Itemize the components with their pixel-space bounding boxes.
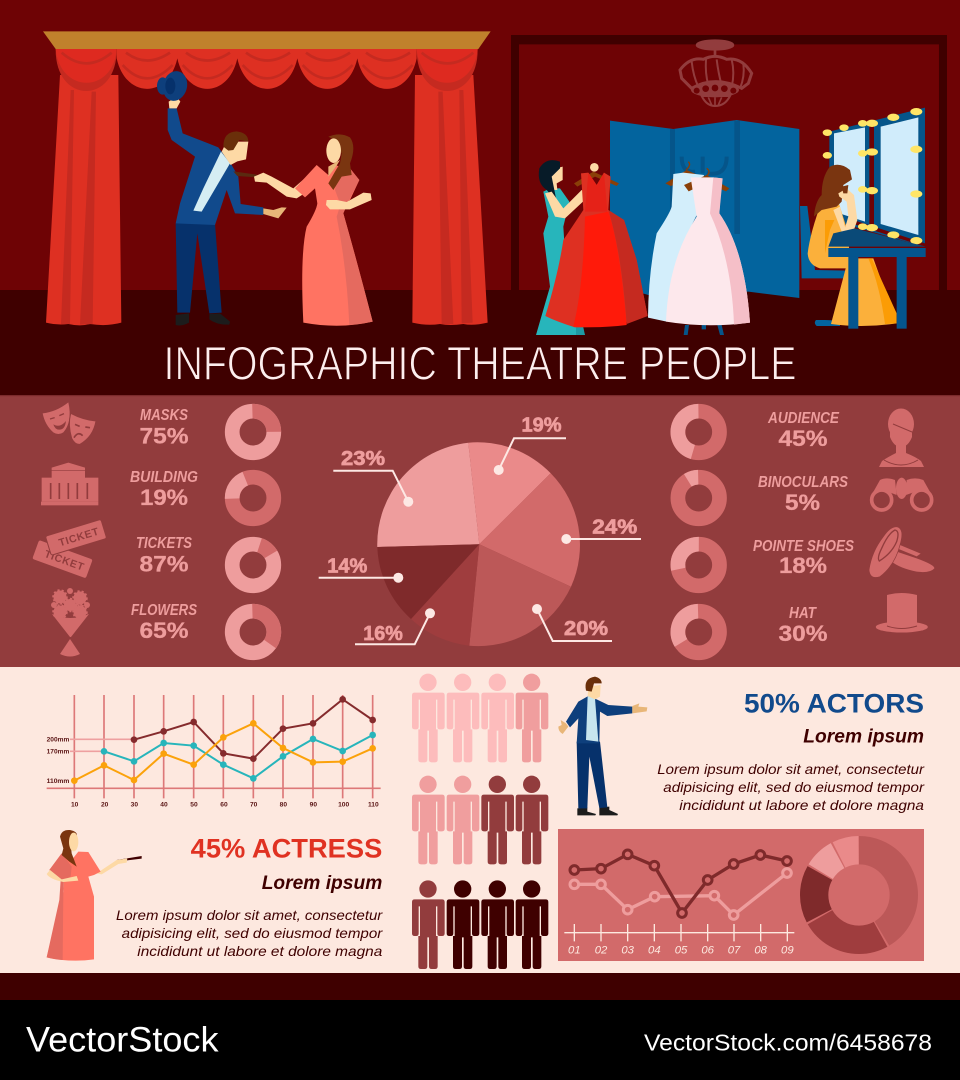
label: tickets: 87% xyxy=(140,552,188,576)
callout: 19%: 19% xyxy=(522,415,562,437)
label: pointe shoes xyxy=(753,538,855,578)
donut: hat xyxy=(670,604,727,660)
axis xyxy=(564,924,794,956)
label: audience: 45% xyxy=(778,426,828,451)
actors paragraph xyxy=(657,761,925,813)
axis: 01 xyxy=(568,944,581,956)
actress paragraph: adipisicing elit, sed do eiusmod tempor xyxy=(122,925,384,941)
callout: 14%: 14% xyxy=(327,556,368,578)
actress subheading: Lorem ipsum xyxy=(262,872,382,894)
label: masks: MASKS xyxy=(140,407,189,424)
actor figure xyxy=(558,677,647,815)
chandelier xyxy=(680,40,752,106)
panel: lower cream section xyxy=(0,667,960,973)
actors paragraph: Lorem ipsum dolor sit amet, consectetur xyxy=(657,761,925,777)
axis: 02 xyxy=(595,944,608,956)
donut: binoculars xyxy=(670,470,727,526)
dark series xyxy=(570,850,791,917)
white dresses on stand xyxy=(648,162,750,335)
donut: flowers xyxy=(232,611,274,653)
callout: 20% xyxy=(532,604,612,641)
label: pointe shoes: POINTE SHOES xyxy=(753,538,855,555)
footer logo: VectorStock xyxy=(26,1021,219,1060)
line chart: 90 xyxy=(310,802,317,809)
callout: 16%: 16% xyxy=(363,623,403,645)
line chart: 40 xyxy=(160,802,168,809)
donut: pointe shoes xyxy=(675,541,723,589)
man bowing with hat xyxy=(157,68,287,325)
icon: theatre masks xyxy=(43,402,96,444)
line chart: 50 xyxy=(190,802,198,809)
icon: tickets xyxy=(32,519,107,578)
panel: line chart and donut xyxy=(558,829,924,961)
background: stage floor xyxy=(0,290,960,395)
label: building: 19% xyxy=(140,485,188,510)
footer url: VectorStock.com/6458678 xyxy=(644,1030,932,1056)
right curtain xyxy=(412,75,488,325)
donut: audience xyxy=(672,406,725,458)
label: binoculars xyxy=(758,474,849,515)
icon: tickets: TICKET xyxy=(43,548,86,574)
callout: 24%: 24% xyxy=(592,516,638,538)
label: hat xyxy=(778,605,828,646)
mirror with bulbs xyxy=(823,108,925,247)
title: INFOGRAPHIC THEATRE PEOPLE xyxy=(164,336,796,390)
callout: 24% xyxy=(561,516,641,544)
actress in pink gown xyxy=(254,134,373,326)
callout: 16% xyxy=(355,608,435,645)
room frame xyxy=(511,35,947,290)
people pictogram xyxy=(412,674,548,969)
callout: 23% xyxy=(333,448,413,507)
icon: tickets: TICKET xyxy=(57,526,101,549)
icon: bouquet xyxy=(51,588,90,656)
label: flowers xyxy=(131,602,198,643)
line chart: 30 xyxy=(131,802,138,809)
actors subheading: Lorem ipsum xyxy=(803,726,924,748)
line chart: 170mm xyxy=(47,749,69,756)
left curtain xyxy=(46,75,121,325)
axis: 09 xyxy=(781,944,794,956)
icon: audience woman xyxy=(879,408,924,467)
icon: pointe shoes xyxy=(869,527,934,577)
donut: masks xyxy=(232,411,274,453)
woman in teal dress xyxy=(536,160,590,335)
callout: 19% xyxy=(494,415,566,475)
label: flowers: FLOWERS xyxy=(131,602,198,619)
actress paragraph: Lorem ipsum dolor sit amet, consectetur xyxy=(116,907,384,923)
axis: 05 xyxy=(675,944,688,956)
actors heading: 50% ACTORS xyxy=(744,688,924,718)
pie chart xyxy=(319,415,641,646)
label: audience: AUDIENCE xyxy=(767,410,840,427)
label: tickets: TICKETS xyxy=(136,535,193,552)
pelmet xyxy=(43,31,491,49)
callout: 20%: 20% xyxy=(564,618,608,640)
label: binoculars: 5% xyxy=(785,490,820,515)
stage scene xyxy=(43,31,491,326)
dark strip xyxy=(0,973,960,1000)
donut chart xyxy=(814,850,904,940)
woman at mirror xyxy=(808,165,897,326)
label: masks xyxy=(140,407,189,448)
axis: 03 xyxy=(621,944,635,956)
axis: 07 xyxy=(728,944,741,956)
axis: 06 xyxy=(701,944,715,956)
line chart xyxy=(47,695,381,809)
donut: tickets xyxy=(226,538,280,592)
label: tickets xyxy=(136,535,193,576)
label: hat: 30% xyxy=(778,621,828,646)
axis: 04 xyxy=(648,944,661,956)
actors paragraph: incididunt ut labore et dolore magna xyxy=(679,797,924,813)
label: audience xyxy=(767,410,840,451)
label: binoculars: BINOCULARS xyxy=(758,474,849,491)
dressing table xyxy=(828,228,926,329)
valance swags xyxy=(56,49,478,91)
line chart: 110mm xyxy=(47,778,69,785)
light series xyxy=(570,869,791,919)
callout: 23%: 23% xyxy=(341,448,385,470)
line chart: 100 xyxy=(338,802,350,809)
dressing room scene xyxy=(511,35,947,335)
line chart: 60 xyxy=(220,802,228,809)
axis: 08 xyxy=(754,944,768,956)
line chart: 110 xyxy=(368,802,379,809)
actors paragraph: adipisicing elit, sed do eiusmod tempor xyxy=(663,779,925,795)
folding screen xyxy=(610,120,799,298)
label: hat: HAT xyxy=(789,605,817,622)
background: stage wall xyxy=(0,0,960,290)
line chart: 20 xyxy=(101,802,109,809)
label: pointe shoes: 18% xyxy=(779,553,827,578)
icon: binoculars xyxy=(871,478,933,510)
actress paragraph: incididunt ut labore et dolore magna xyxy=(137,943,383,959)
footer bar xyxy=(0,1000,960,1080)
label: building xyxy=(130,469,198,510)
line chart: 200mm xyxy=(47,737,69,744)
label: masks: 75% xyxy=(140,424,188,448)
panel: statistics band xyxy=(0,395,960,667)
red dress on hanger xyxy=(545,163,648,327)
callout: 14% xyxy=(319,556,403,583)
actress heading: 45% ACTRESS xyxy=(191,833,382,863)
line chart: 80 xyxy=(280,802,287,809)
label: flowers: 65% xyxy=(140,618,188,643)
line chart: 70 xyxy=(250,802,258,809)
icon: top hat xyxy=(876,593,928,632)
line chart: 10 xyxy=(71,802,79,809)
label: building: BUILDING xyxy=(130,469,198,486)
actress figure xyxy=(47,830,142,961)
icon: theatre building xyxy=(41,463,98,505)
donut: building xyxy=(232,477,274,519)
actress paragraph xyxy=(116,907,384,959)
chair xyxy=(800,206,848,326)
